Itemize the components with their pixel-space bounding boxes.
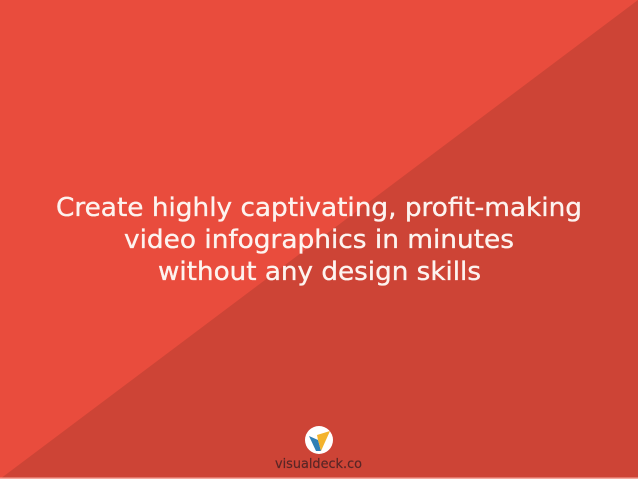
headline bbox=[56, 193, 582, 287]
brand name: visualdeck.co bbox=[275, 456, 362, 472]
headline: without any design skills bbox=[158, 257, 481, 287]
headline: video infographics in minutes bbox=[124, 225, 514, 255]
icon: visualdeck logo bbox=[305, 426, 333, 454]
headline: Create highly captivating, profit-making bbox=[56, 193, 582, 223]
